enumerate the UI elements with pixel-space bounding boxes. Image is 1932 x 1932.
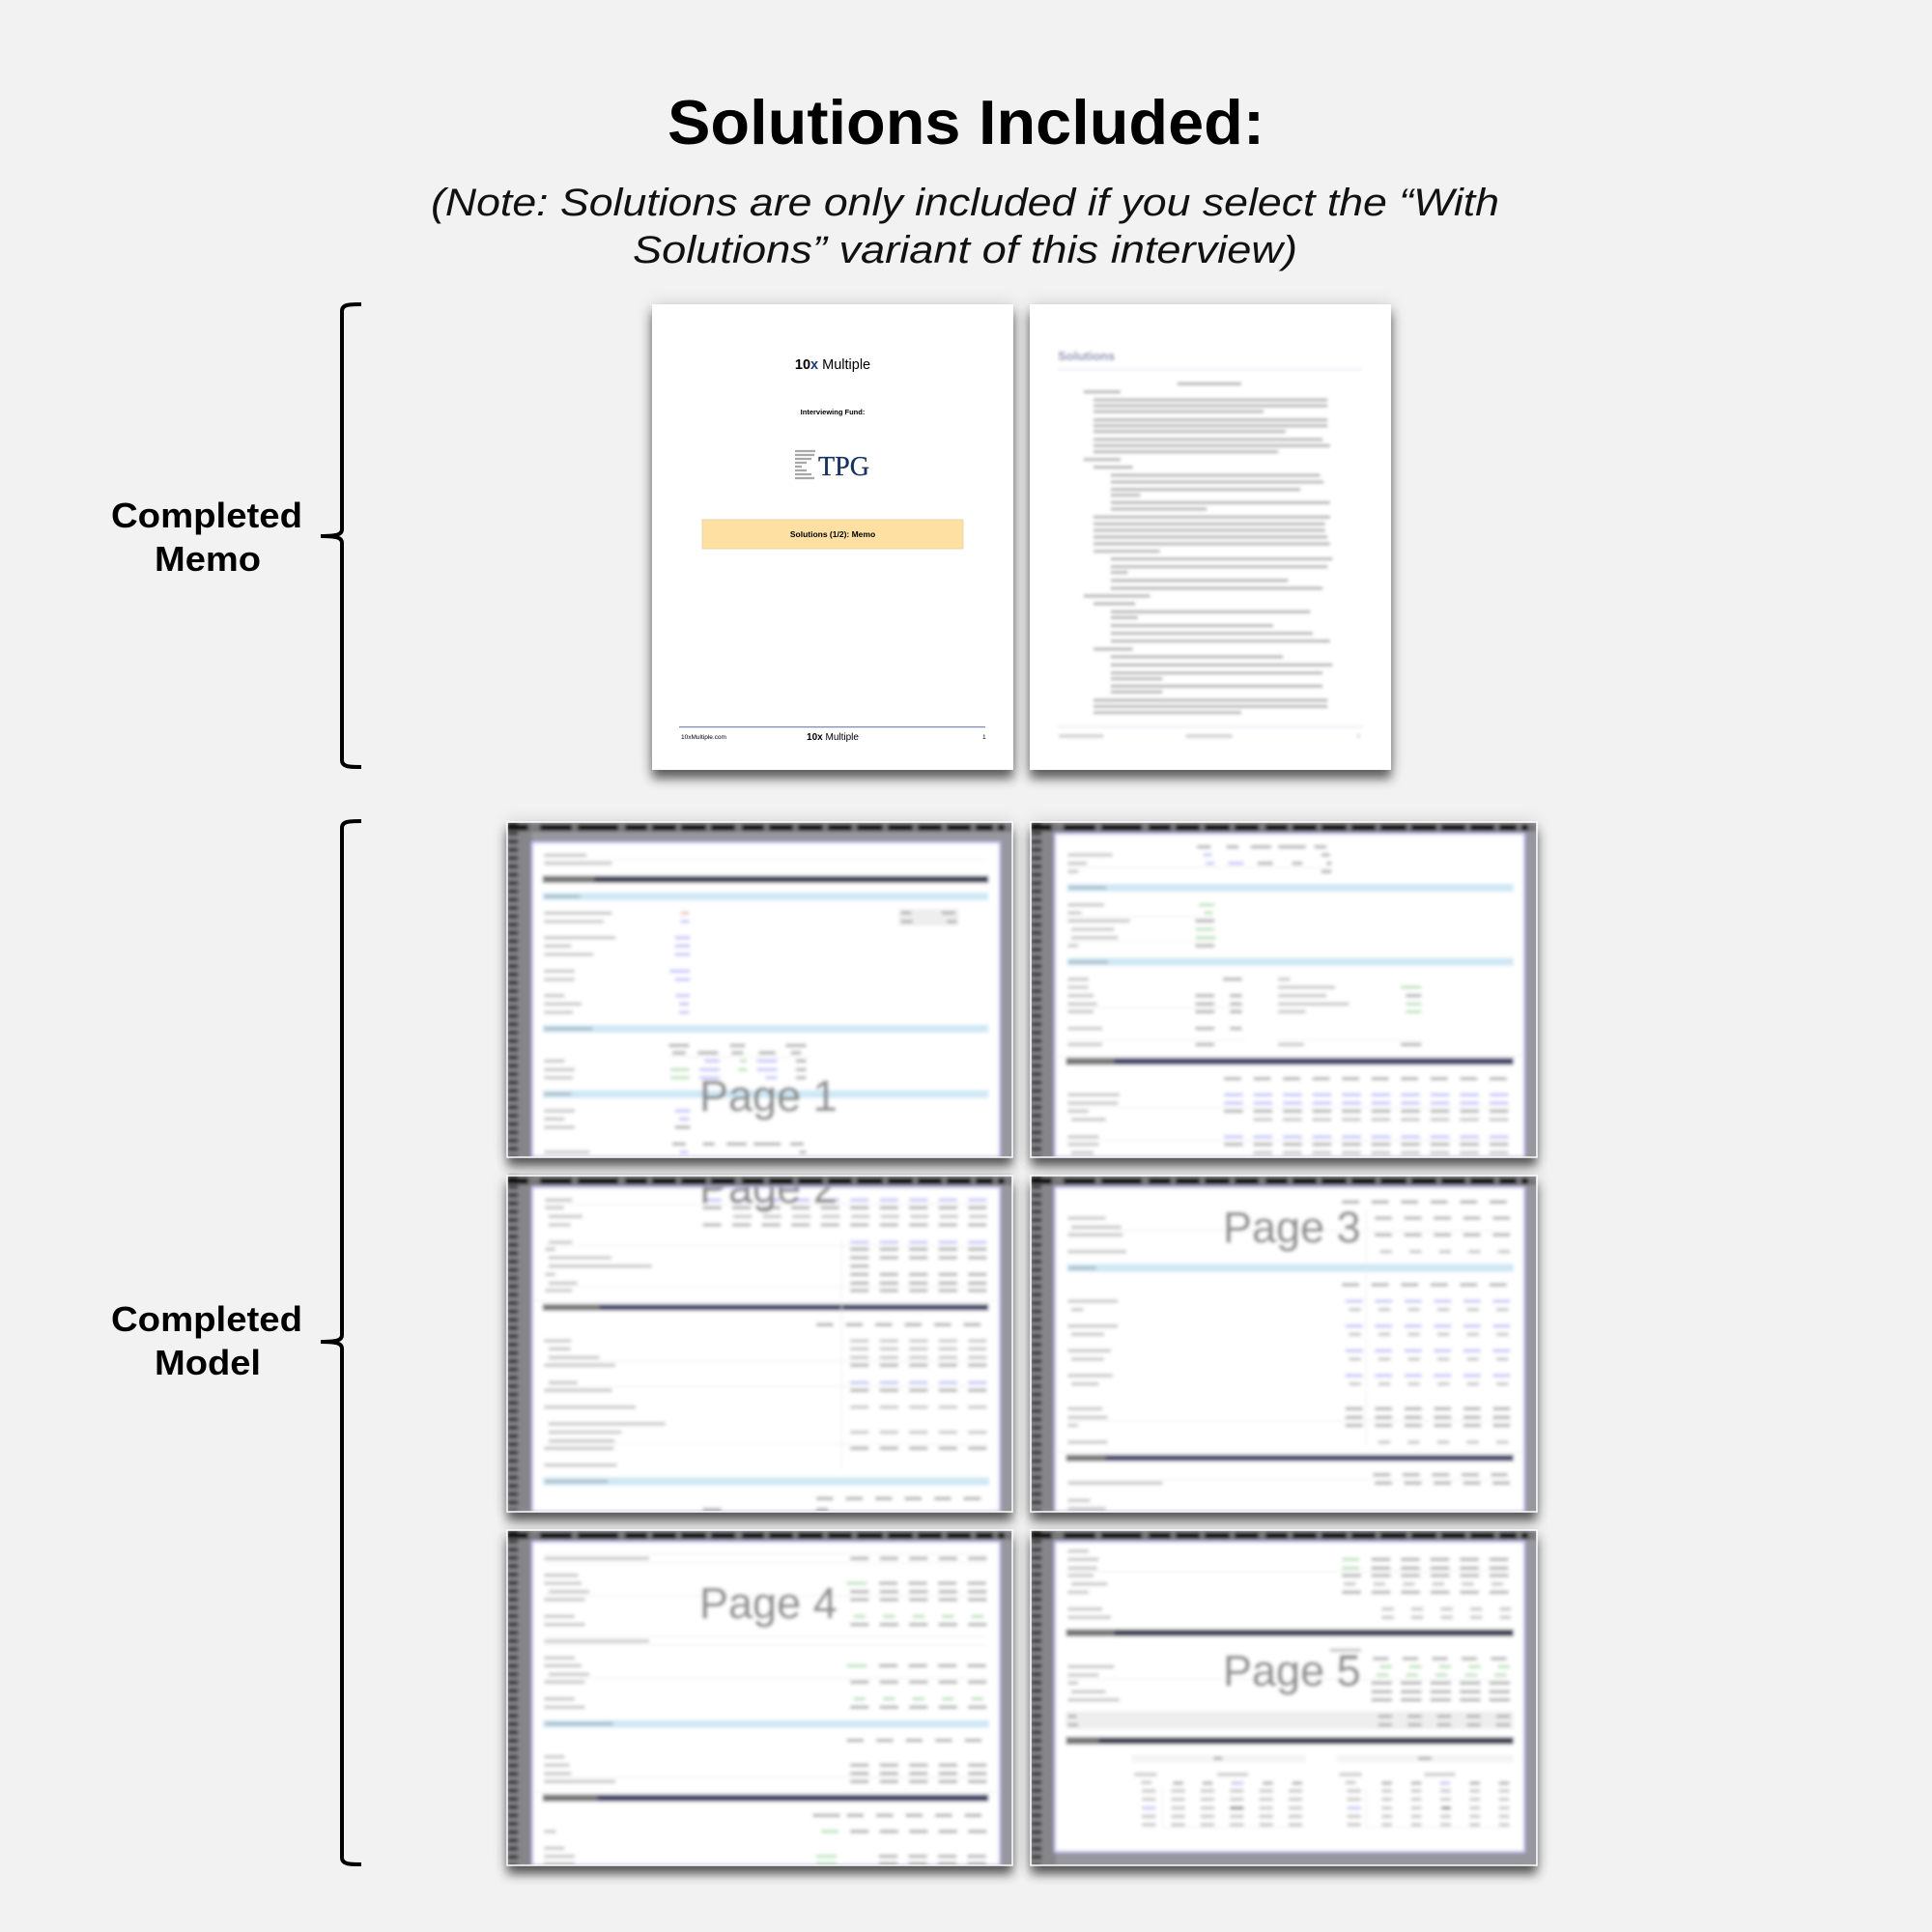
- panel: memo cover page: [652, 304, 1013, 779]
- subtitle note: (Note: Solutions are only included if you select the “With: [431, 182, 1499, 224]
- footer: [679, 726, 986, 743]
- watermark: page 4: Page 4: [699, 1578, 838, 1628]
- brand logo: 10x Multiple: [795, 357, 870, 373]
- watermark: page 1: Page 1: [699, 1071, 838, 1121]
- footer: 10xMultiple.com: [681, 734, 726, 741]
- label: completed memo: [111, 496, 302, 579]
- panel: model page 2 top: [1031, 822, 1537, 1166]
- solutions memo banner: Solutions (1/2): Memo: [790, 529, 875, 539]
- panel: model page 5: [1031, 1530, 1537, 1874]
- bracket: model: [321, 821, 361, 1864]
- interviewing fund label: Interviewing Fund:: [801, 408, 865, 416]
- label: completed memo: Memo: [155, 539, 261, 579]
- label: completed model: Completed: [111, 1299, 302, 1339]
- bracket: memo: [321, 304, 361, 767]
- heading: solutions: Solutions: [1058, 349, 1115, 363]
- footer: 1: [982, 734, 986, 741]
- label: completed model: Model: [155, 1343, 261, 1382]
- watermark: page 2: Page 2: [699, 1163, 838, 1212]
- title: Solutions Included:: [668, 87, 1264, 157]
- label: completed model: [111, 1299, 302, 1382]
- label: completed memo: Completed: [111, 496, 302, 535]
- icon: TPG logo: TPG: [818, 451, 869, 482]
- subtitle note: Solutions” variant of this interview): [633, 229, 1297, 271]
- panel: model page 1: [507, 822, 1012, 1166]
- footer: 10x Multiple: [807, 732, 859, 743]
- solutions memo banner: [702, 520, 963, 549]
- panel: model page 2 bottom: [507, 1163, 1012, 1520]
- panel: memo solutions page: [1030, 304, 1391, 779]
- panel: model page 3: [1031, 1176, 1537, 1520]
- watermark: page 3: Page 3: [1223, 1203, 1361, 1252]
- memo body text lines: [1058, 369, 1362, 736]
- subtitle note: [431, 182, 1499, 271]
- icon: TPG logo: [795, 451, 869, 482]
- watermark: page 5: Page 5: [1223, 1646, 1361, 1695]
- panel: model page 4: [507, 1530, 1012, 1874]
